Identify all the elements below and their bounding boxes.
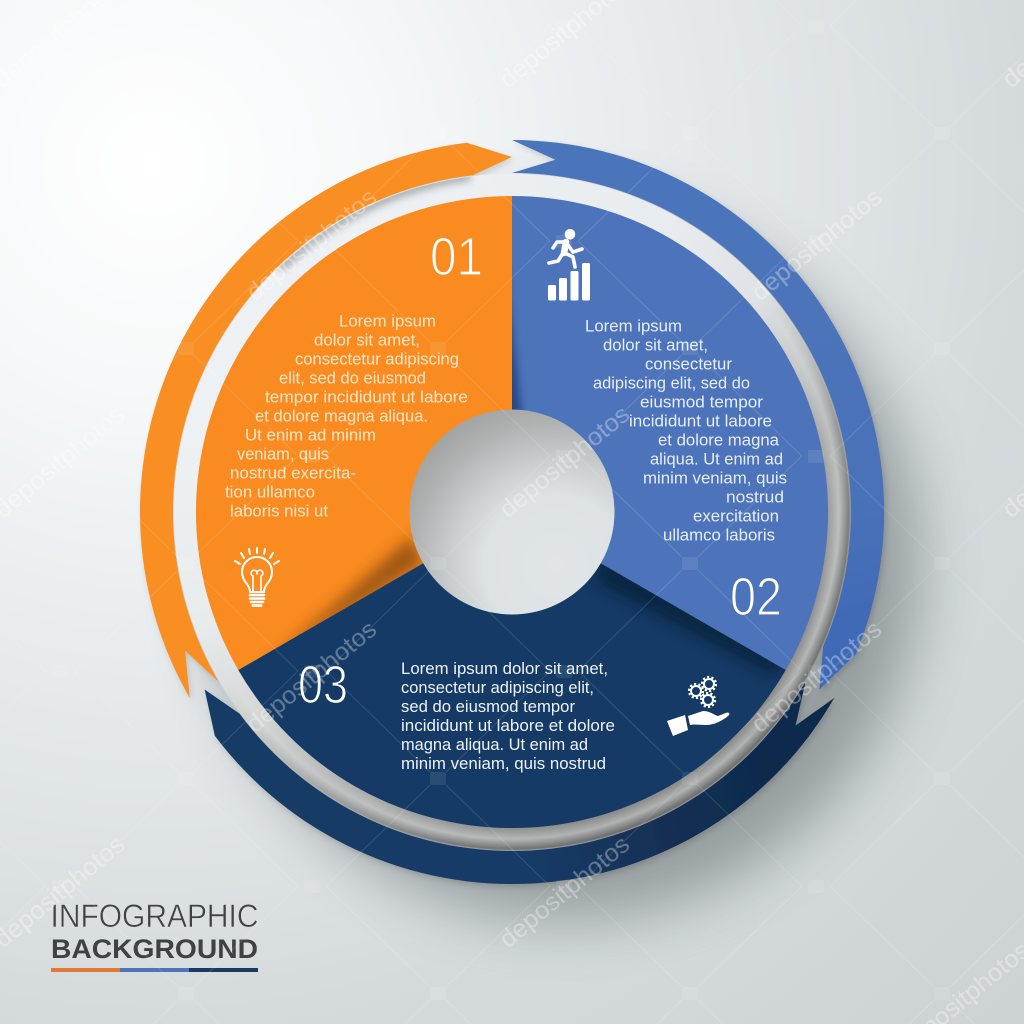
text block 02: Lorem ipsum <box>585 318 682 336</box>
tricolour underline <box>51 968 258 972</box>
text block 03: Lorem ipsum dolor sit amet, <box>401 660 608 678</box>
text block 02: et dolore magna <box>658 432 780 450</box>
title block <box>50 898 258 972</box>
text block 03: minim veniam, quis nostrud <box>401 755 606 773</box>
text block 01: veniam, quis <box>237 446 329 464</box>
text block 01: consectetur adipiscing <box>295 351 459 369</box>
title line one: INFOGRAPHIC <box>50 898 258 934</box>
icon: light bulb <box>235 548 279 606</box>
text block 03: consectetur adipiscing elit, <box>401 679 594 697</box>
ring rim shading <box>246 324 850 850</box>
watermark text: depositphotos <box>241 183 382 307</box>
orange arrow shadow on the ring <box>280 176 470 268</box>
text block 02: dolor sit amet, <box>603 337 708 355</box>
text block 02: aliqua. Ut enim ad <box>650 451 783 469</box>
text block 03: sed do eiusmod tempor <box>401 698 576 716</box>
panel: 02 blue <box>504 196 828 670</box>
text block 01: tion ullamco <box>225 484 315 502</box>
panel: 01 orange <box>196 196 512 670</box>
arrow: orange <box>140 143 512 698</box>
text block 02: eiusmod tempor <box>640 394 764 412</box>
number 01: 01 <box>430 227 483 287</box>
text block 02: exercitation <box>693 508 779 526</box>
watermark text: depositphotos <box>494 830 635 954</box>
arrow: blue <box>512 140 884 689</box>
drop shadow of the circle <box>204 204 920 920</box>
centre hole <box>410 410 614 614</box>
text block 01: dolor sit amet, <box>314 332 420 350</box>
watermark text: depositphotos <box>494 400 635 524</box>
text block 03: magna aliqua. Ut enim ad <box>401 736 588 754</box>
watermark text: depositphotos <box>241 615 382 739</box>
text block 02: nostrud <box>726 489 784 507</box>
icon: runner on bars <box>548 229 590 300</box>
ring between arrows and pie <box>172 172 852 852</box>
text block 02 <box>585 318 787 545</box>
watermark text: depositphotos <box>746 183 887 307</box>
title line two: BACKGROUND <box>51 934 258 964</box>
number 02: 02 <box>730 567 782 627</box>
text block 02: consectetur <box>645 356 733 374</box>
text block 01: laboris nisi ut <box>230 502 328 520</box>
text block 01: et dolore magna aliqua. <box>255 408 428 426</box>
arrow: navy <box>205 682 834 884</box>
text block 02: ullamco laboris <box>663 527 775 545</box>
text block 01: Ut enim ad minim <box>245 426 376 444</box>
panel: 03 navy <box>238 555 790 828</box>
text block 03: incididunt ut labore et dolore <box>401 717 615 735</box>
text block 01 <box>225 313 468 520</box>
text block 02: minim veniam, quis <box>643 470 787 488</box>
text block 02: adipiscing elit, sed do <box>593 375 750 393</box>
text block 03 <box>401 660 615 773</box>
watermark text: depositphotos <box>746 615 887 739</box>
text block 01: elit, sed do eiusmod <box>279 370 426 388</box>
number 03: 03 <box>298 655 348 715</box>
text block 01: Lorem ipsum <box>339 313 436 331</box>
icon: gears over hand <box>667 677 729 736</box>
text block 02: incididunt ut labore <box>629 413 772 431</box>
text block 01: tempor incididunt ut labore <box>265 388 468 406</box>
text block 01: nostrud exercita- <box>230 464 356 482</box>
